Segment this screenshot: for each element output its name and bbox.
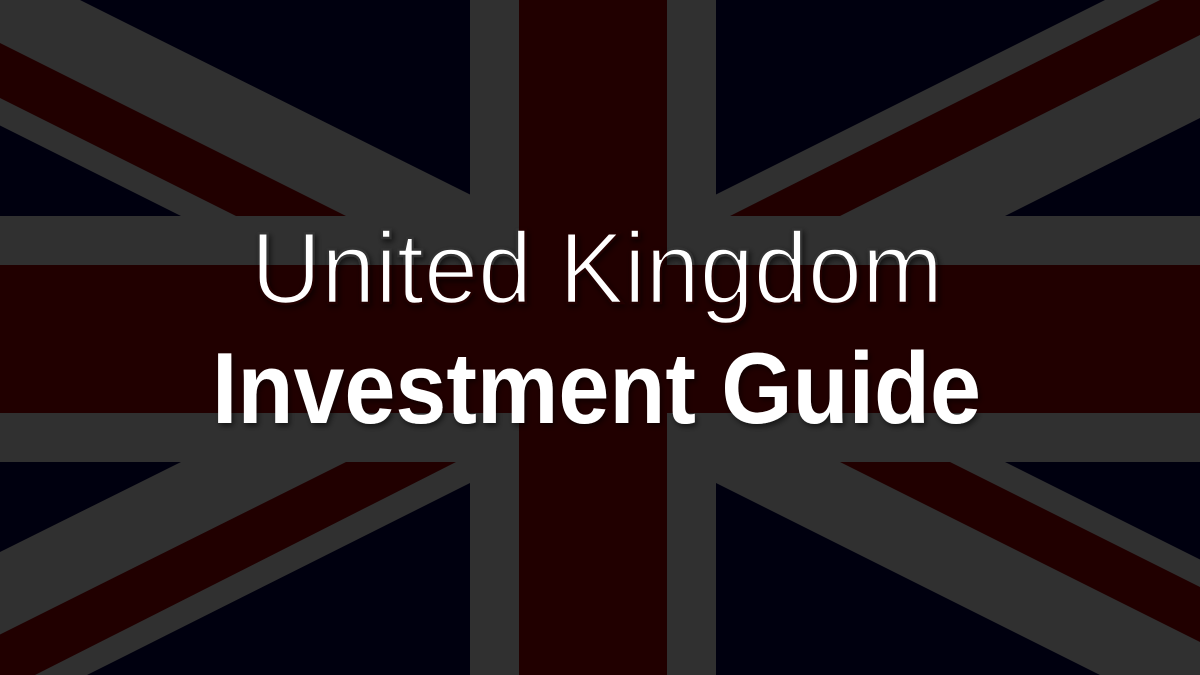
title line 2: Investment Guide: Investment Guide [212, 333, 981, 445]
title [212, 213, 981, 445]
title line 1: United Kingdom: United Kingdom [251, 213, 943, 325]
